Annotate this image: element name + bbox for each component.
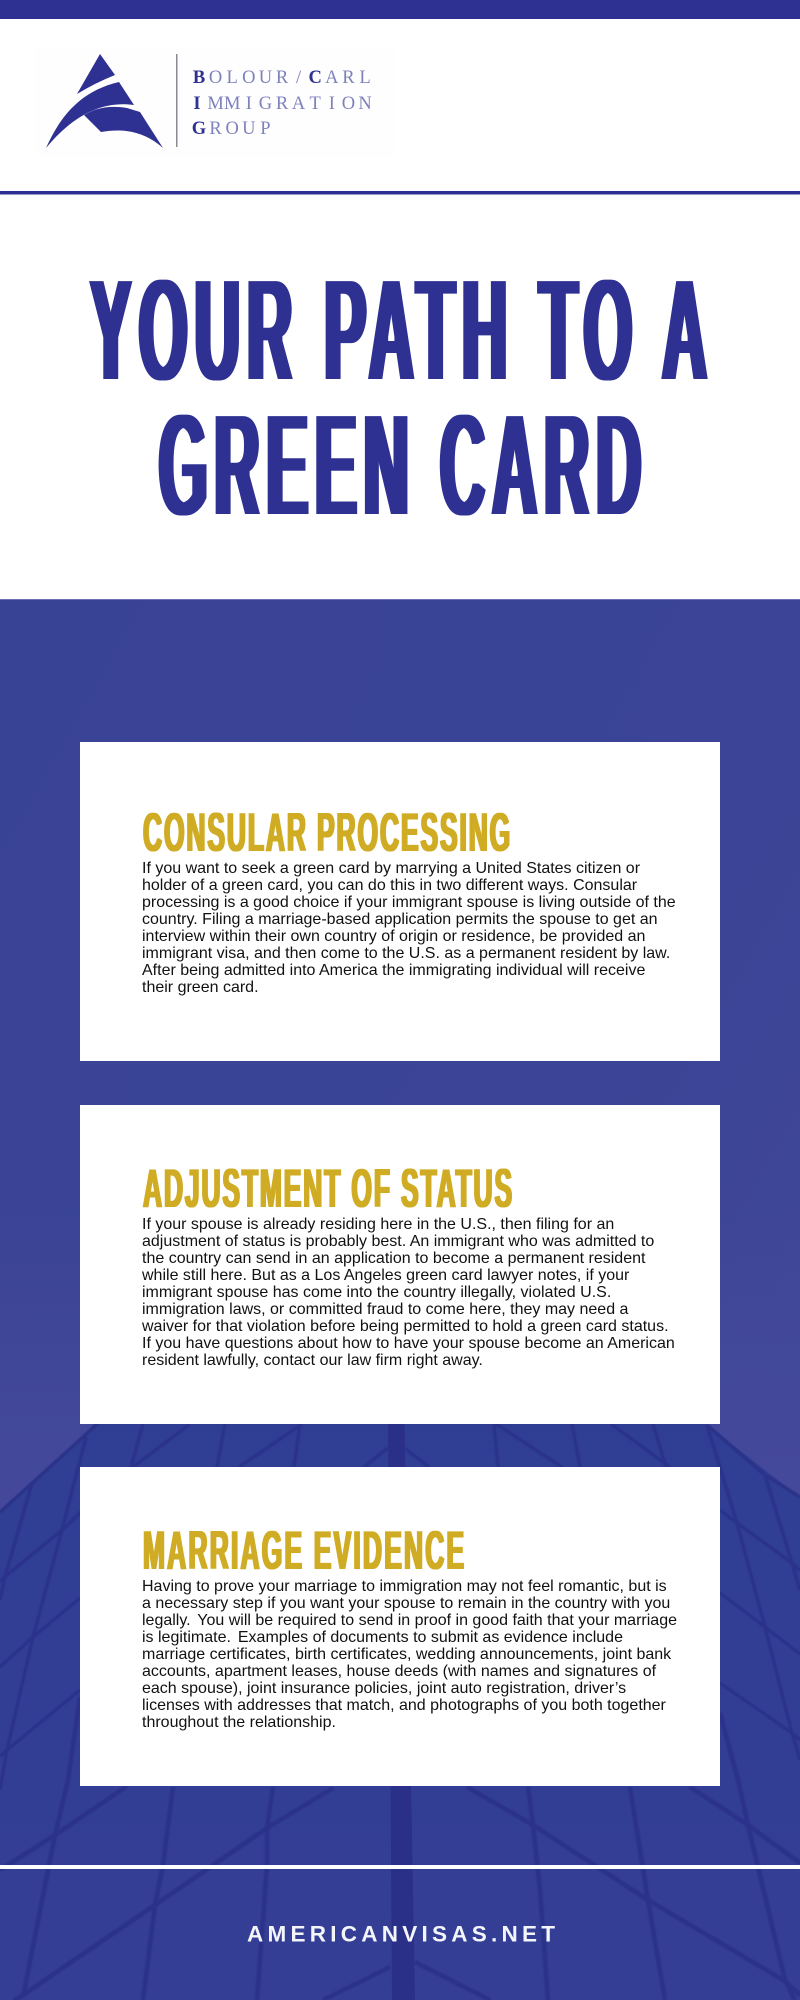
text: consular processing: country. Filing a marriage-based application permits the spouse to get an (142, 911, 658, 928)
logo wordmark (192, 68, 372, 139)
heading: consular processing: CONSULAR PROCESSING (143, 803, 510, 864)
panel: adjustment of status (80, 1105, 720, 1424)
text: consular processing: interview within their own country of origin or residence, be provided an (142, 928, 645, 945)
header band (0, 0, 800, 600)
title: YOUR PATH TO A (90, 248, 707, 414)
text: adjustment of status: immigrant spouse has come into the country illegally, violated U.S. (142, 1284, 611, 1301)
text: consular processing: immigrant visa, and then come to the U.S. as a permanent resident by law. (142, 945, 670, 962)
text: adjustment of status: the country can send in an application to become a permanent resident (142, 1250, 646, 1267)
panel: marriage evidence (80, 1467, 720, 1786)
text: marriage evidence: each spouse), joint insurance policies, joint auto registration, driver’s (142, 1680, 626, 1697)
logo wordmark: GROUP (192, 119, 271, 139)
text: adjustment of status: while still here. But as a Los Angeles green card lawyer notes, if your (141, 1267, 630, 1284)
text: adjustment of status: If your spouse is already residing here in the U.S., then filing for an (142, 1216, 614, 1233)
text: adjustment of status: If you have questions about how to have your spouse become an American (142, 1335, 675, 1352)
logo (35, 47, 395, 157)
text: marriage evidence: licenses with addresses that match, and photographs of you both together (142, 1697, 667, 1714)
text: marriage evidence: accounts, apartment leases, house deeds (with names and signatures of (142, 1663, 657, 1680)
text: consular processing: processing is a good choice if your immigrant spouse is living outside of the (142, 894, 676, 911)
panel: consular processing (80, 742, 720, 1061)
icon: logo mark (46, 54, 163, 148)
text: marriage evidence: Having to prove your marriage to immigration may not feel romantic, but is (142, 1578, 667, 1595)
logo wordmark: I MMIGRATION (193, 94, 372, 114)
text: consular processing: holder of a green card, you can do this in two different ways. Consular (142, 877, 638, 894)
logo divider (176, 54, 178, 147)
blue background with building lattice (0, 599, 800, 2000)
heading: marriage evidence: MARRIAGE EVIDENCE (143, 1521, 464, 1582)
center column (388, 1400, 415, 2000)
footer url: AMERICANVISAS.NET (247, 1922, 555, 1946)
text: consular processing: If you want to seek a green card by marrying a United States citizen or (142, 860, 641, 877)
text: consular processing: their green card. (142, 979, 259, 996)
title (90, 248, 707, 549)
text: adjustment of status: resident lawfully, contact our law firm right away. (142, 1352, 483, 1369)
title: GREEN CARD (159, 383, 641, 549)
text: marriage evidence: legally. You will be required to send in proof in good faith that your marriage (142, 1612, 677, 1629)
text: marriage evidence: a necessary step if you want your spouse to remain in the country with you (142, 1595, 670, 1612)
text: consular processing: After being admitted into America the immigrating individual will receive (142, 962, 645, 979)
logo wordmark: BOLOUR/ CARL (193, 68, 371, 88)
text: marriage evidence: throughout the relationship. (142, 1714, 336, 1731)
footer divider (0, 1865, 800, 1869)
heading: adjustment of status: ADJUSTMENT OF STATUS (143, 1159, 512, 1220)
text: adjustment of status: immigration laws, or committed fraud to come here, they may need a (142, 1301, 629, 1318)
text: marriage evidence: marriage certificates, birth certificates, wedding announcements, joint bank (142, 1646, 672, 1663)
text: adjustment of status: adjustment of status is probably best. An immigrant who was admitted to (142, 1233, 654, 1250)
text: marriage evidence: is legitimate. Examples of documents to submit as evidence include (142, 1629, 623, 1646)
text: adjustment of status: waiver for that violation before being permitted to hold a green card status. (141, 1318, 669, 1335)
